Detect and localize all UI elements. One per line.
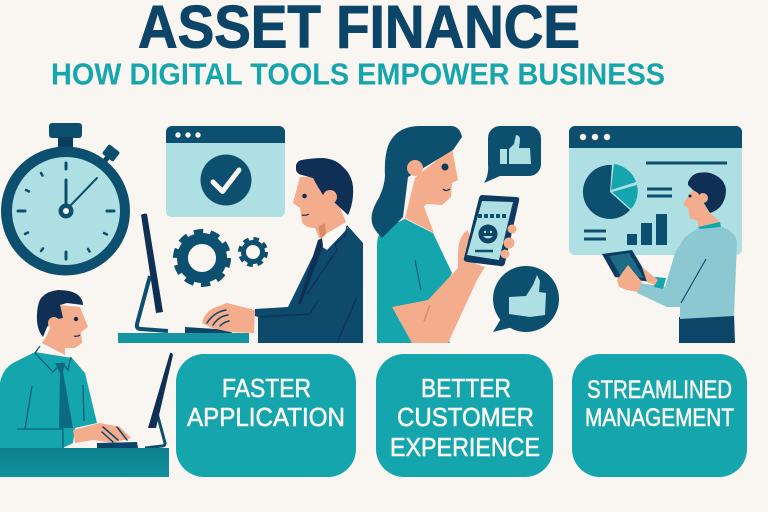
trousers xyxy=(679,314,735,343)
illustration: woman with phone xyxy=(372,126,519,343)
keyboard xyxy=(185,327,232,333)
body xyxy=(0,352,97,448)
icon: thumbs-up square bubble xyxy=(484,126,541,183)
tie xyxy=(55,363,73,428)
bar chart xyxy=(627,214,667,245)
desk xyxy=(0,448,169,477)
hair xyxy=(688,172,726,213)
icon: small gear xyxy=(240,239,266,265)
sweater xyxy=(637,227,737,319)
illustration: man at lower-left desk xyxy=(0,290,173,477)
button: streamlined management: MANAGEMENT xyxy=(585,404,734,432)
monitor xyxy=(145,353,173,448)
icon: stopwatch xyxy=(1,123,130,276)
neck shadow xyxy=(318,223,326,239)
button: faster application: FASTER xyxy=(222,373,311,403)
hair xyxy=(296,158,353,215)
subtitle: HOW DIGITAL TOOLS EMPOWER BUSINESS xyxy=(51,56,665,92)
button: faster application xyxy=(176,354,356,477)
button: better customer experience: BETTER xyxy=(421,373,511,403)
cuff xyxy=(654,277,666,289)
suit xyxy=(255,225,363,343)
face xyxy=(293,177,346,238)
neck and face xyxy=(405,148,458,233)
tie xyxy=(298,238,323,304)
button: streamlined management: STREAMLINED xyxy=(587,376,732,404)
fingers xyxy=(500,224,516,258)
shirt collar xyxy=(320,222,348,250)
neck and face xyxy=(42,305,88,355)
tablet and hands xyxy=(602,250,658,292)
illustration: man at computer xyxy=(118,158,363,343)
hand xyxy=(202,303,255,333)
button: better customer experience: CUSTOMER xyxy=(397,402,534,432)
icon: thumbs-up round bubble xyxy=(493,266,559,332)
hair xyxy=(37,290,83,337)
arm xyxy=(392,267,485,343)
monitor xyxy=(137,214,168,331)
hand xyxy=(73,423,131,443)
shirt xyxy=(377,219,452,343)
pie chart xyxy=(583,164,638,219)
icon: browser window with check xyxy=(166,126,285,217)
illustration: man with tablet xyxy=(602,172,737,343)
button: better customer experience xyxy=(376,354,553,477)
neck and face xyxy=(683,190,720,227)
button: streamlined management xyxy=(572,354,747,477)
panel: dashboard window xyxy=(569,126,742,255)
phone xyxy=(464,195,519,266)
palm xyxy=(458,230,485,270)
hair xyxy=(372,126,462,238)
desk xyxy=(118,333,249,343)
button: better customer experience: EXPERIENCE xyxy=(390,432,540,462)
icon: large gear xyxy=(176,232,228,284)
button: faster application: APPLICATION xyxy=(187,402,345,432)
collar xyxy=(698,222,721,229)
keyboard xyxy=(97,442,138,448)
